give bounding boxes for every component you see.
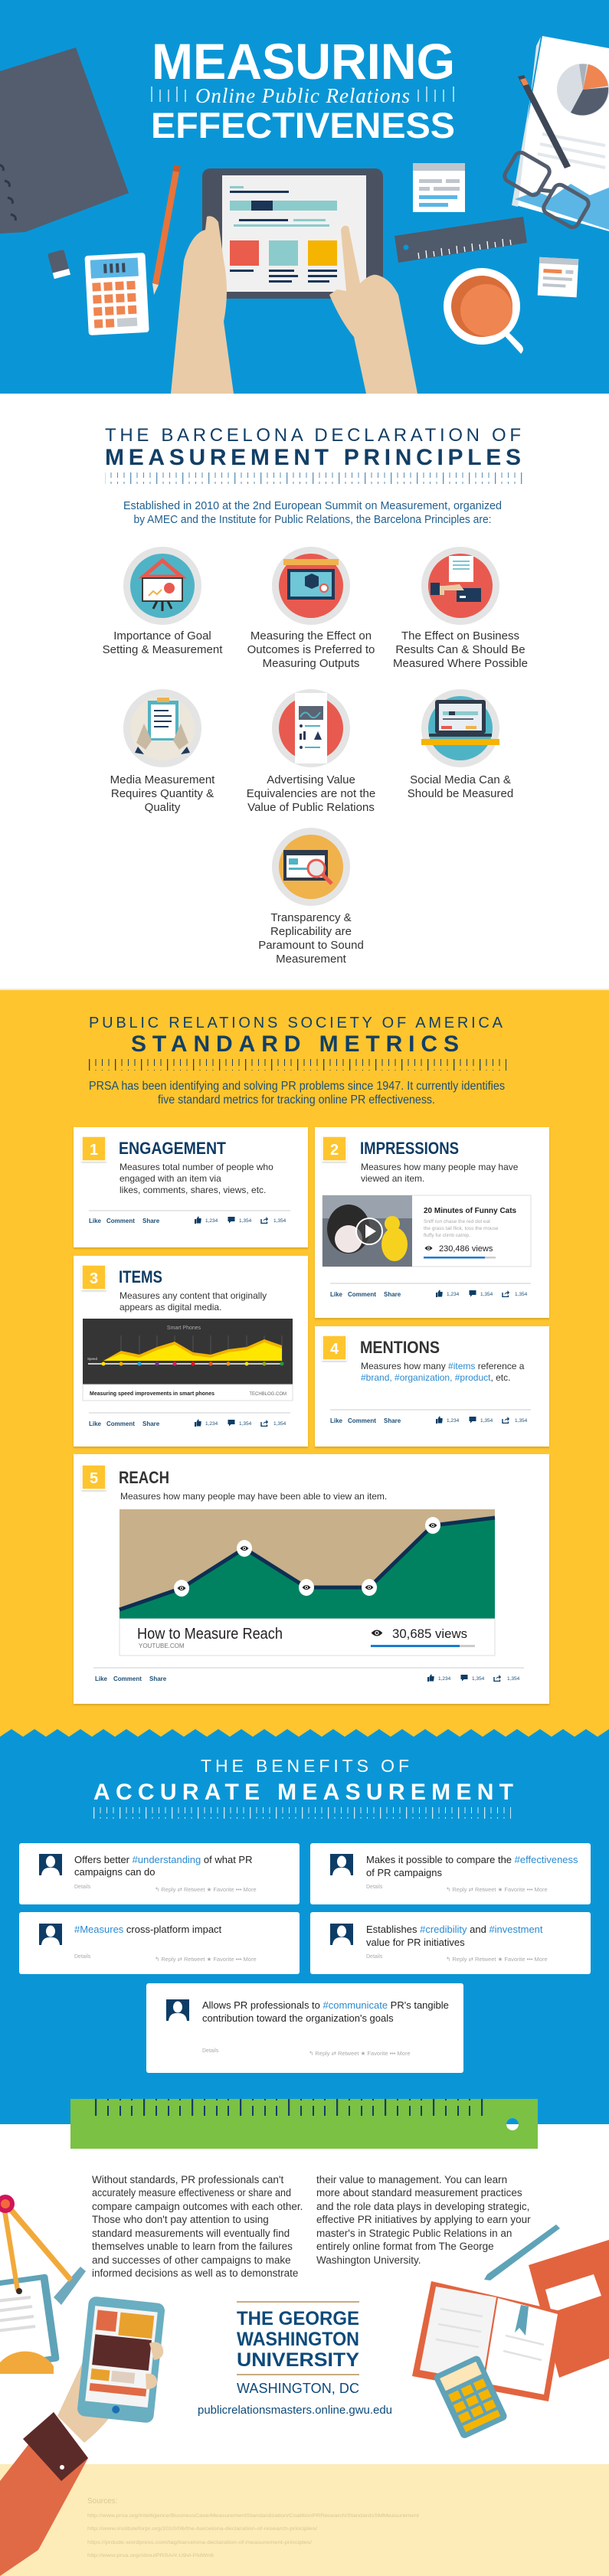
tweet 2: of PR campaigns xyxy=(366,1867,442,1878)
heading: benefits of accurate measurement: ACCURATE MEASUREMENT xyxy=(93,1780,513,1805)
chart: smart phones: Measuring speed improvements in smart phones xyxy=(90,1391,214,1397)
card 2: impressions: Comment xyxy=(348,1291,376,1298)
illustration: note card xyxy=(413,163,465,212)
card 2: impressions: Measures how many people may have xyxy=(361,1162,519,1172)
title: Online Public Relations xyxy=(195,84,410,107)
tweet 5: Allows PR professionals to #communicate PR's tangible xyxy=(202,1999,449,2011)
GWU logo: publicrelationsmasters.online.gwu.edu xyxy=(198,2404,392,2417)
closing paragraph xyxy=(92,2174,531,2279)
closing paragraph: Washington University. xyxy=(316,2254,421,2266)
title xyxy=(151,33,455,145)
chart: smart phones: Smart Phones xyxy=(167,1326,201,1331)
illustration: notebook xyxy=(0,47,129,234)
illustration: book, pencil, calculator xyxy=(412,2225,609,2440)
tweet 5 xyxy=(146,1983,463,2073)
tweet 1: ↰ Reply ⇄ Retweet ★ Favorite ••• More xyxy=(155,1886,257,1893)
heading: PRSA standard metrics: STANDARD METRICS xyxy=(131,1031,459,1057)
card 3: items: 1,354 xyxy=(273,1421,286,1427)
principle 7: transparency xyxy=(258,828,364,966)
video thumbnail: fluffy fur climb catnip. xyxy=(424,1233,470,1238)
closing paragraph: compare campaign outcomes with each other. xyxy=(92,2201,303,2212)
GWU logo: WASHINGTON xyxy=(237,2329,359,2350)
sources: Sources: xyxy=(87,2497,117,2506)
card 4: mentions: 1,354 xyxy=(480,1418,493,1424)
yellow metrics background xyxy=(0,989,609,1737)
principle 1: goal setting: Setting & Measurement xyxy=(103,643,223,656)
green ruler xyxy=(70,2099,538,2149)
title: EFFECTIVENESS xyxy=(151,105,455,145)
video thumbnail xyxy=(323,1195,531,1267)
illustration: small note xyxy=(538,257,578,297)
tweet 5: ↰ Reply ⇄ Retweet ★ Favorite ••• More xyxy=(309,2050,411,2057)
intro paragraph: Barcelona: Established in 2010 at the 2nd European Summit on Measurement, organized xyxy=(123,499,502,512)
video thumbnail: the grass tail flick, toss the mouse xyxy=(424,1226,499,1231)
sources: http://www.instituteforpr.org/2010/06/the-barcelona-declaration-of-research-principles/ xyxy=(87,2526,317,2532)
closing paragraph: informed decisions as well as to demonstrate xyxy=(92,2267,298,2279)
chart: reach line xyxy=(120,1509,495,1656)
card 4: mentions: MENTIONS xyxy=(360,1338,440,1357)
card 3: items: 3 xyxy=(90,1270,98,1287)
principle 4: quantity and quality: Quality xyxy=(145,801,181,814)
heading: Barcelona declaration: MEASUREMENT PRINCIPLES xyxy=(105,445,521,470)
closing paragraph: effective PR initiatives by applying to earn your xyxy=(316,2214,531,2225)
card 1: engagement: likes, comments, shares, views, etc. xyxy=(120,1185,266,1195)
video thumbnail: Sniff run chase the red dot eat xyxy=(424,1219,490,1224)
principle 4: quantity and quality: Requires Quantity & xyxy=(111,787,214,800)
principle 2: outcomes: Measuring Outputs xyxy=(263,657,359,670)
heading: PRSA standard metrics xyxy=(89,1015,503,1057)
card 4: mentions: 1,234 xyxy=(447,1418,460,1424)
card 5: reach: 1,354 xyxy=(472,1676,485,1682)
principle 2: outcomes xyxy=(247,547,375,670)
card 2: impressions: 1,354 xyxy=(480,1292,493,1297)
tweet 5: Details xyxy=(202,2048,219,2054)
intro paragraph: PRSA: PRSA has been identifying and solving PR problems since 1947. It currently identifies xyxy=(89,1080,505,1093)
closing paragraph: and successes of other campaigns to make xyxy=(92,2254,291,2266)
GWU logo: WASHINGTON, DC xyxy=(237,2381,359,2396)
card 1: engagement: ENGAGEMENT xyxy=(119,1139,226,1158)
tweet 4 xyxy=(310,1912,591,1974)
tweet 5: contribution toward the organization's goals xyxy=(202,2012,394,2024)
card 4: mentions xyxy=(315,1326,549,1447)
card 4: mentions: Measures how many #items reference a xyxy=(361,1361,525,1371)
card 1: engagement: 1,354 xyxy=(273,1218,286,1224)
card 3: items: Like xyxy=(89,1420,102,1427)
tweet 1: campaigns can do xyxy=(74,1866,156,1878)
card 3: items: ITEMS xyxy=(119,1267,162,1286)
illustration: report paper with pie chart xyxy=(512,36,609,231)
tweet 1: Offers better #understanding of what PR xyxy=(74,1854,252,1865)
chart: smart phones: Speed xyxy=(87,1357,98,1361)
heading: benefits of accurate measurement: THE BENEFITS OF xyxy=(201,1756,409,1776)
principle 5: advertising value: Value of Public Relations xyxy=(247,801,375,814)
card 5: reach: 1,234 xyxy=(438,1676,451,1682)
tweet 4: Establishes #credibility and #investment xyxy=(366,1924,543,1935)
tweet 1 xyxy=(19,1843,300,1904)
tweet 4: Details xyxy=(366,1954,383,1960)
closing paragraph: master's in Strategic Public Relations in an xyxy=(316,2228,512,2239)
closing paragraph: themselves unable to learn from the failures xyxy=(92,2241,293,2252)
illustration: coffee mug xyxy=(444,268,523,354)
header background xyxy=(0,0,609,394)
tweet 4: ↰ Reply ⇄ Retweet ★ Favorite ••• More xyxy=(446,1956,548,1963)
tweet 4: value for PR initiatives xyxy=(366,1937,465,1948)
chart: smart phones xyxy=(83,1319,293,1401)
principle 6: social media xyxy=(408,689,513,800)
principle 2: outcomes: Measuring the Effect on xyxy=(250,629,372,642)
principle 3: business results xyxy=(393,547,528,670)
card 1: engagement: Comment xyxy=(106,1218,135,1224)
tweet 3: Details xyxy=(74,1954,91,1960)
heading: benefits of accurate measurement xyxy=(93,1756,513,1805)
card 2: impressions: Share xyxy=(384,1291,401,1298)
video thumbnail: 20 Minutes of Funny Cats xyxy=(424,1207,517,1215)
card 4: mentions: 1,354 xyxy=(515,1418,528,1424)
card 2: impressions: 2 xyxy=(330,1142,339,1159)
principle 1: goal setting: Importance of Goal xyxy=(113,629,211,642)
principle 7: transparency: Paramount to Sound xyxy=(258,939,364,952)
principle 2: outcomes: Outcomes is Preferred to xyxy=(247,643,375,656)
principle 1: goal setting xyxy=(103,547,223,656)
card 3: items: 1,234 xyxy=(205,1421,218,1427)
card 4: mentions: 4 xyxy=(330,1341,339,1358)
card 4: mentions: Comment xyxy=(348,1417,376,1424)
benefits blue background with zigzag xyxy=(0,1729,609,2124)
card 4: mentions: Share xyxy=(384,1417,401,1424)
closing paragraph: standard measurements will eventually find xyxy=(92,2228,290,2239)
card 1: engagement: engaged with an item via xyxy=(120,1173,221,1184)
principle 7: transparency: Measurement xyxy=(276,953,347,966)
card 5: reach: 1,354 xyxy=(507,1676,520,1682)
sources background xyxy=(0,2464,609,2576)
illustration: ruler xyxy=(395,217,527,263)
tweet 2: ↰ Reply ⇄ Retweet ★ Favorite ••• More xyxy=(446,1886,548,1893)
illustration: pen xyxy=(518,75,571,168)
card 3: items: Share xyxy=(142,1420,160,1427)
sources xyxy=(87,2497,419,2558)
closing paragraph: accurately measure effectiveness or share and xyxy=(92,2187,291,2198)
tweet 1: Details xyxy=(74,1885,91,1890)
GWU logo xyxy=(198,2301,392,2417)
GWU logo: THE GEORGE xyxy=(237,2308,359,2329)
title: MEASURING xyxy=(152,33,455,90)
card 1: engagement: 1 xyxy=(90,1142,98,1159)
tweet 2 xyxy=(310,1843,591,1904)
card 3: items: appears as digital media. xyxy=(120,1302,221,1313)
video thumbnail: 230,486 views xyxy=(439,1244,493,1254)
GWU logo: UNIVERSITY xyxy=(237,2349,359,2371)
illustration: glasses xyxy=(503,150,591,230)
card 2: impressions: Like xyxy=(330,1291,343,1298)
tweet 2: Details xyxy=(366,1885,383,1890)
card 1: engagement xyxy=(74,1127,308,1247)
tweet 3 xyxy=(19,1912,300,1974)
card 5: reach xyxy=(74,1454,549,1704)
card 5: reach: REACH xyxy=(119,1468,169,1487)
card 1: engagement: Like xyxy=(89,1218,102,1224)
intro paragraph: PRSA xyxy=(89,1080,505,1107)
principle 3: business results: The Effect on Business xyxy=(401,629,519,642)
card 2: impressions xyxy=(315,1127,549,1318)
card 5: reach: Share xyxy=(149,1675,167,1682)
sources: https://prdude.wordpress.com/tag/barcelona-declaration-of-measurement-principles/ xyxy=(87,2540,312,2545)
card 2: impressions: viewed an item. xyxy=(361,1173,424,1184)
principle 4: quantity and quality: Media Measurement xyxy=(110,773,215,786)
card 5: reach: Measures how many people may have been able to view an item. xyxy=(120,1491,387,1502)
card 3: items: Comment xyxy=(106,1420,135,1427)
closing paragraph: Those who don't pay attention to using xyxy=(92,2214,269,2225)
chart: reach line: YOUTUBE.COM xyxy=(139,1643,185,1649)
intro paragraph: Barcelona xyxy=(123,499,502,526)
chart: reach line: 30,685 views xyxy=(392,1626,467,1641)
tweet 3: #Measures cross-platform impact xyxy=(74,1924,222,1935)
sources: http://www.prsa.org/AboutPRSA/#.U9vl-PldWn8 xyxy=(87,2553,214,2558)
illustration: tablet with hands xyxy=(171,168,417,394)
card 3: items: Measures any content that originally xyxy=(120,1290,267,1301)
card 2: impressions: 1,354 xyxy=(515,1292,528,1297)
card 1: engagement: 1,354 xyxy=(239,1218,252,1224)
intro paragraph: Barcelona: by AMEC and the Institute for Public Relations, the Barcelona Principles are: xyxy=(133,513,492,526)
principle 7: transparency: Transparency & xyxy=(270,911,352,924)
card 1: engagement: 1,234 xyxy=(205,1218,218,1224)
principle 7: transparency: Replicability are xyxy=(270,925,352,938)
heading: PRSA standard metrics: PUBLIC RELATIONS SOCIETY OF AMERICA xyxy=(89,1015,503,1031)
card 2: impressions: 1,234 xyxy=(447,1292,460,1297)
chart: smart phones: TECHBLOG.COM xyxy=(249,1392,286,1397)
card 5: reach: Comment xyxy=(113,1675,142,1682)
card 3: items xyxy=(74,1256,308,1447)
tweet 2: Makes it possible to compare the #effectiveness xyxy=(366,1854,578,1865)
closing paragraph: more about standard measurement practices xyxy=(316,2187,522,2198)
principle 5: advertising value: Advertising Value xyxy=(267,773,355,786)
tweet 3: ↰ Reply ⇄ Retweet ★ Favorite ••• More xyxy=(155,1956,257,1963)
principle 6: social media: Social Media Can & xyxy=(410,773,511,786)
principle 3: business results: Measured Where Possible xyxy=(393,657,528,670)
illustration: compass, clipboard, phone in hand xyxy=(0,2195,165,2576)
intro paragraph: PRSA: five standard metrics for tracking online PR effectiveness. xyxy=(158,1093,435,1107)
heading: Barcelona declaration xyxy=(105,425,521,470)
card 1: engagement: Measures total number of people who xyxy=(120,1162,273,1172)
card 3: items: 1,354 xyxy=(239,1421,252,1427)
sources: http://www.prsa.org/Intelligence/BusinessCase/MeasurementStandardization/CoalitionPRResearch/StandardsSMMeasurement xyxy=(87,2513,419,2519)
card 5: reach: Like xyxy=(95,1675,108,1682)
card 5: reach: 5 xyxy=(90,1470,98,1487)
card 2: impressions: IMPRESSIONS xyxy=(360,1139,459,1158)
closing paragraph: Without standards, PR professionals can't xyxy=(92,2174,283,2185)
principle 4: quantity and quality xyxy=(110,689,215,814)
principle 3: business results: Results Can & Should Be xyxy=(395,643,526,656)
principle 6: social media: Should be Measured xyxy=(408,787,513,800)
card 4: mentions: #brand, #organization, #product, etc. xyxy=(361,1372,510,1383)
closing paragraph: their value to management. You can learn xyxy=(316,2174,507,2185)
illustration: eraser xyxy=(47,250,70,279)
closing paragraph: entirely online format from The George xyxy=(316,2241,494,2252)
principle 5: advertising value: Equivalencies are not the xyxy=(247,787,375,800)
closing paragraph: and the role data plays in developing strategic, xyxy=(316,2201,529,2212)
illustration: pencil xyxy=(152,165,181,295)
illustration: calculator xyxy=(84,253,149,335)
card 1: engagement: Share xyxy=(142,1218,160,1224)
principle 5: advertising value xyxy=(247,689,375,814)
card 4: mentions: Like xyxy=(330,1417,343,1424)
heading: Barcelona declaration: THE BARCELONA DECLARATION OF xyxy=(105,425,521,446)
chart: reach line: How to Measure Reach xyxy=(137,1626,283,1643)
